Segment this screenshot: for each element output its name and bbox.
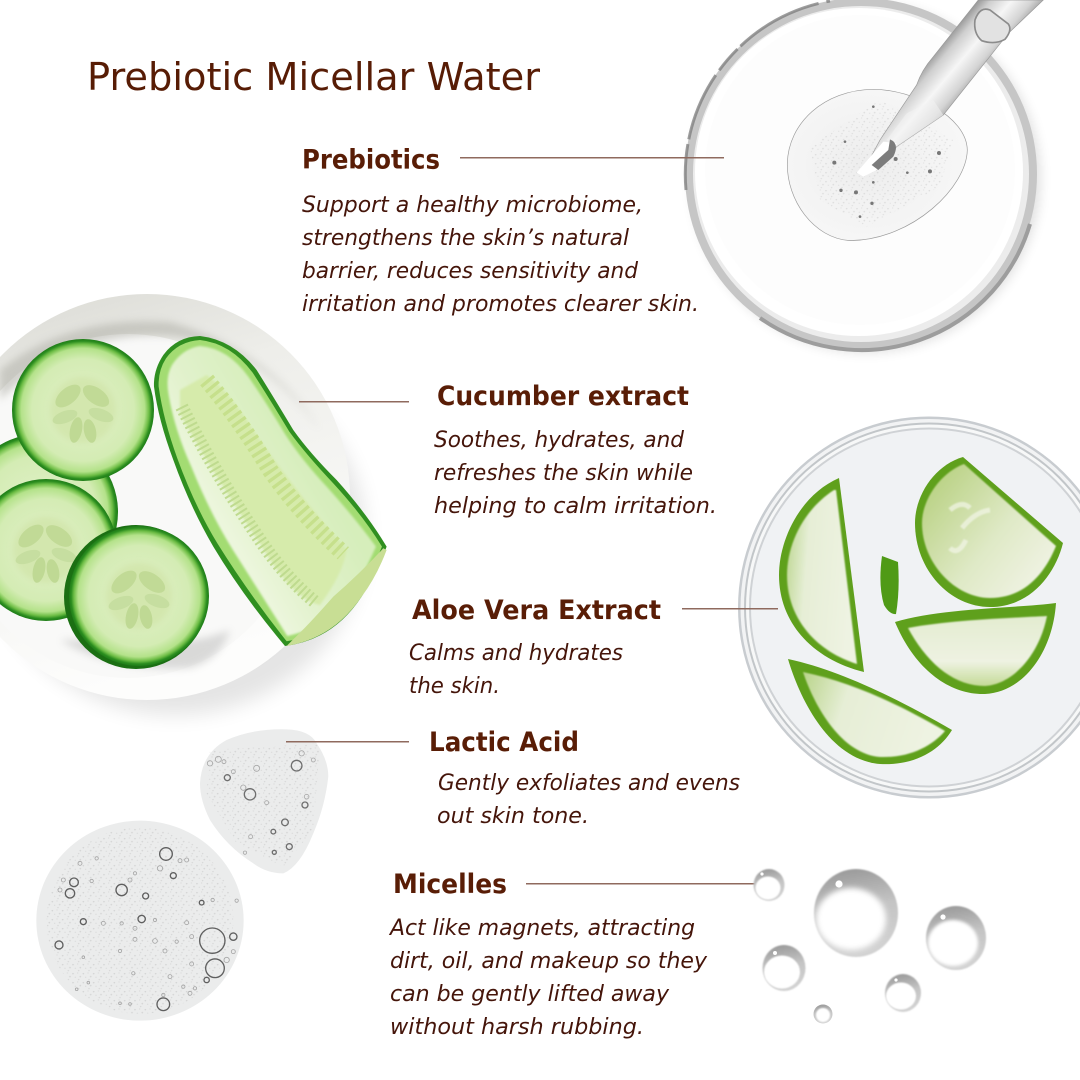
label: micelles: Micelles <box>393 869 507 900</box>
image: gel droplet blob <box>200 729 328 873</box>
label: prebiotics: strengthens the skin’s natural <box>302 226 629 251</box>
label: lactic acid <box>286 727 740 829</box>
pipette <box>857 0 1043 177</box>
aloe small piece <box>880 556 899 614</box>
connector line lactic <box>286 741 409 742</box>
label: cucumber extract: Soothes, hydrates, and <box>434 428 685 453</box>
label: aloe vera extract: the skin. <box>409 674 500 699</box>
droplet 5 <box>885 974 921 1012</box>
connector line micelles <box>526 883 757 884</box>
title: Prebiotic Micellar Water <box>87 55 540 99</box>
label: lactic acid: Lactic Acid <box>429 727 579 758</box>
label: aloe vera extract: Calms and hydrates <box>409 641 623 666</box>
image: aloe vera dish <box>738 416 1080 798</box>
droplet 6 <box>814 1004 832 1024</box>
aloe piece left <box>779 478 864 672</box>
cucumber slice behind <box>0 434 118 590</box>
aloe piece top right <box>915 457 1063 607</box>
image: cucumber plate <box>0 294 387 715</box>
droplet 2 <box>814 869 898 957</box>
label: cucumber extract: helping to calm irritation. <box>434 494 717 519</box>
aloe piece bottom <box>788 659 952 764</box>
label: micelles: can be gently lifted away <box>390 982 670 1007</box>
aloe piece middle right <box>895 603 1056 694</box>
label: micelles: dirt, oil, and makeup so they <box>390 949 708 974</box>
image: petri dish with gel and pipette <box>685 0 1043 352</box>
cucumber slice bottom <box>64 525 209 669</box>
label: prebiotics: barrier, reduces sensitivity and <box>302 259 639 284</box>
connector line aloe <box>682 608 778 610</box>
label: cucumber extract: refreshes the skin while <box>434 461 693 486</box>
label: micelles: Act like magnets, attracting <box>388 916 695 941</box>
water droplets <box>754 869 986 1024</box>
image: round gel droplet <box>36 821 244 1021</box>
label: prebiotics: Prebiotics <box>302 144 440 176</box>
droplet 1 <box>754 869 784 901</box>
cucumber slice top <box>12 339 154 481</box>
label: aloe vera extract: Aloe Vera Extract <box>412 595 661 626</box>
label: cucumber extract <box>299 381 717 519</box>
label: lactic acid: out skin tone. <box>437 804 589 829</box>
label: cucumber extract: Cucumber extract <box>437 381 689 412</box>
label: prebiotics <box>302 144 724 317</box>
label: micelles: without harsh rubbing. <box>390 1015 644 1040</box>
droplet 4 <box>762 945 806 991</box>
label: prebiotics: Support a healthy microbiome, <box>302 193 643 218</box>
connector line prebiotics <box>460 157 724 158</box>
label: aloe vera extract <box>409 595 778 699</box>
gel drop on dish <box>787 89 967 241</box>
connector line cucumber <box>299 401 409 402</box>
label: lactic acid: Gently exfoliates and evens <box>438 771 740 796</box>
droplet 3 <box>926 906 986 970</box>
label: prebiotics: irritation and promotes clearer skin. <box>302 292 699 317</box>
cucumber slice left <box>0 479 117 621</box>
cucumber halved spear <box>154 336 387 646</box>
label: micelles <box>388 869 757 1040</box>
